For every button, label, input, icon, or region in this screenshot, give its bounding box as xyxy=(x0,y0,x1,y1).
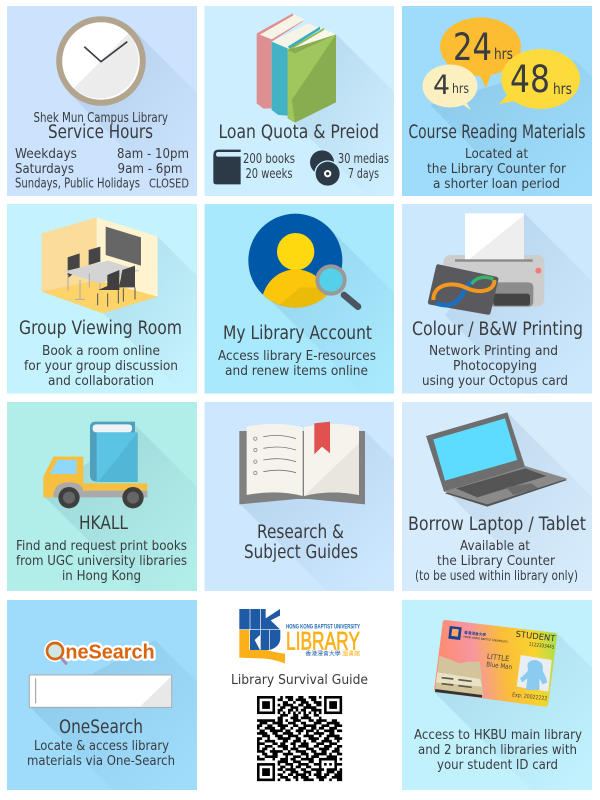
text: group viewing room: Book a room online xyxy=(42,343,160,359)
text: course reading: a shorter loan period xyxy=(433,176,560,192)
text: course reading xyxy=(408,122,586,192)
text: service hours details xyxy=(15,111,189,192)
panel: course reading xyxy=(402,6,592,196)
icon: open book xyxy=(239,422,365,504)
icon: 48 hrs bubble: hrs xyxy=(553,80,572,98)
icon: student id card xyxy=(434,620,557,707)
icon: truck carrying book xyxy=(43,422,147,508)
icon: 24 hrs bubble: 24 xyxy=(453,26,492,69)
text: my library account: and renew items online xyxy=(225,363,368,379)
text: course reading: the Library Counter for xyxy=(427,161,566,177)
panel: library logo and qr xyxy=(231,609,368,781)
text: service hours details: Weekdays xyxy=(15,146,77,162)
text: student id access: and 2 branch libraries with xyxy=(418,742,577,758)
icon: student id card: STUDENT xyxy=(515,629,557,643)
search box xyxy=(29,675,172,707)
text: course reading: Located at xyxy=(465,146,528,162)
icon: 24 hrs bubble: hrs xyxy=(494,45,513,63)
text: group viewing room xyxy=(19,318,182,389)
icon: small book xyxy=(213,150,241,184)
text: borrow laptop: the Library Counter xyxy=(437,553,555,569)
text: research guides: Research & xyxy=(257,522,344,543)
logo: HKBU library: LIBRARY xyxy=(286,627,360,655)
text: printing: using your Octopus card xyxy=(422,373,568,389)
panel: my library account xyxy=(204,204,394,394)
text: book quota: 20 weeks xyxy=(246,166,292,182)
text: research guides xyxy=(244,522,358,563)
icon: student id card: 1122333445 xyxy=(528,642,555,651)
text: hkall: Find and request print books xyxy=(16,538,187,554)
text: student id access: your student ID card xyxy=(437,757,558,773)
text: media quota: 30 medias xyxy=(338,151,389,167)
logo: HKBU library: HONG KONG BAPTIST UNIVERSITY xyxy=(286,623,361,630)
icon: student id card: Blue Man xyxy=(486,660,513,671)
icon: student id card: LITTLE xyxy=(486,652,510,663)
text: borrow laptop xyxy=(408,514,586,584)
icon: student id card: 香港浸會大學 xyxy=(464,630,487,637)
text: service hours details: Saturdays xyxy=(15,161,74,177)
panel: service hours xyxy=(7,6,197,196)
icon: student id card: Exp: 20022222 xyxy=(512,692,548,702)
text: onesearch: materials via One-Search xyxy=(27,753,175,769)
text: group viewing room: for your group discussion xyxy=(24,358,178,374)
text: service hours details: Shek Mun Campus Library xyxy=(34,111,168,126)
panel: research guides xyxy=(204,402,394,591)
icon: 24 hrs bubble xyxy=(440,17,521,88)
text: my library account: My Library Account xyxy=(223,323,372,344)
panel: group viewing room xyxy=(7,204,197,394)
text: service hours details: 9am - 6pm xyxy=(118,161,182,177)
text: research guides: Subject Guides xyxy=(244,542,358,563)
text: my library account xyxy=(218,323,376,379)
text: printing: Photocopying xyxy=(453,358,537,374)
text: group viewing room: Group Viewing Room xyxy=(19,318,182,339)
logo: HKBU library: 圖書館 xyxy=(342,650,360,658)
text: service hours details: Sundays, Public Holidays xyxy=(15,176,140,192)
text: group viewing room: and collaboration xyxy=(48,373,154,389)
icon: discs xyxy=(310,150,341,187)
text: student id access xyxy=(414,727,582,773)
icon: meeting room xyxy=(42,217,158,313)
qr code xyxy=(257,696,342,781)
icon: printer and octopus card xyxy=(428,213,544,315)
icon: laptop xyxy=(426,412,567,507)
text: printing xyxy=(412,319,583,389)
icon: 4 hrs bubble: 4 xyxy=(433,70,450,101)
icon: user with magnifier xyxy=(248,214,358,310)
icon: clock xyxy=(56,16,146,106)
heading: loan quota: Loan Quota & Preiod xyxy=(218,122,379,143)
icon: 4 hrs bubble xyxy=(422,64,478,110)
text: onesearch: OneSearch xyxy=(59,717,143,738)
text: service hours details: CLOSED xyxy=(149,176,189,190)
icon: 48 hrs bubble: 48 xyxy=(510,58,550,101)
heading: library survival guide: Library Survival Guide xyxy=(231,673,368,688)
text: my library account: Access library E-resources xyxy=(218,348,376,364)
text: media quota xyxy=(338,151,389,182)
icon: 4 hrs bubble: hrs xyxy=(452,82,469,97)
panel: borrow laptop xyxy=(402,402,592,591)
text: onesearch: Locate & access library xyxy=(34,738,169,754)
text: borrow laptop: Available at xyxy=(460,538,530,554)
text: service hours details: 8am - 10pm xyxy=(117,146,189,162)
text: printing: Network Printing and xyxy=(429,343,558,359)
icon: student id card: HONG KONG BAPTIST UNIVERSITY xyxy=(463,635,508,644)
text: hkall: from UGC university libraries xyxy=(16,553,187,569)
icon: onesearch logo: neSearch xyxy=(65,640,155,663)
panel: printing xyxy=(402,204,592,394)
icon: 48 hrs bubble xyxy=(499,49,580,109)
panel: student id card xyxy=(402,600,592,790)
text: hkall xyxy=(16,513,187,584)
logo: HKBU library xyxy=(239,609,361,663)
text: service hours details: Service Hours xyxy=(48,122,153,143)
text: hkall: in Hong Kong xyxy=(62,568,141,584)
panel: loan quota xyxy=(204,6,394,196)
logo: HKBU library: 香港浸會大學 xyxy=(305,650,341,658)
text: media quota: 7 days xyxy=(348,166,379,182)
text: onesearch xyxy=(27,717,175,769)
text: hkall: HKALL xyxy=(79,513,129,534)
panel: onesearch xyxy=(7,600,197,790)
text: book quota xyxy=(243,151,295,182)
text: book quota: 200 books xyxy=(243,151,295,167)
panel: hkall xyxy=(7,402,197,591)
icon: stack of books xyxy=(257,13,336,123)
